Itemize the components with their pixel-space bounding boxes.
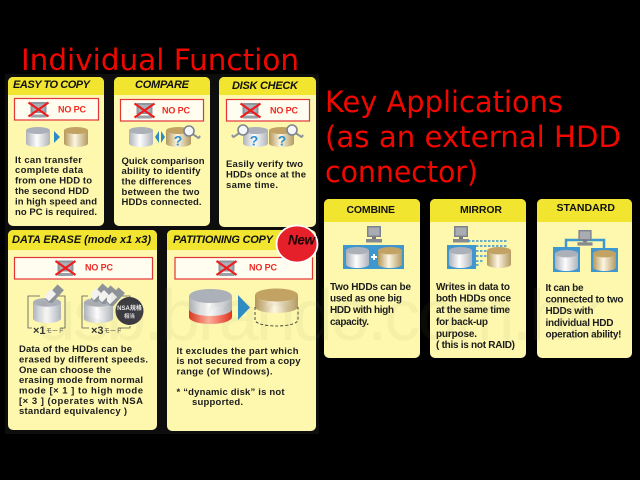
description: both HDDs once bbox=[436, 294, 511, 304]
panel: partitioning copy bbox=[167, 230, 316, 431]
heading: Key Applications: Key Applications bbox=[325, 85, 563, 119]
icon: check drives bbox=[232, 125, 304, 148]
description: HDD with high bbox=[330, 305, 394, 316]
icon: check drives: ? bbox=[278, 132, 286, 148]
panel: easy to copy bbox=[8, 77, 104, 226]
badge: New bbox=[276, 226, 318, 262]
heading: mirror: MIRROR bbox=[460, 204, 502, 216]
description: is not secured from a copy bbox=[176, 356, 301, 367]
icon: erase x1: モード bbox=[46, 328, 64, 335]
description: Easily verify two bbox=[226, 159, 303, 170]
no pc badge: NO PC bbox=[270, 106, 298, 116]
icon: mirrored drives bbox=[447, 226, 511, 269]
description bbox=[15, 155, 97, 218]
icon: NSA badge: 相当 bbox=[124, 312, 135, 320]
description: at the same time bbox=[436, 305, 510, 316]
icon: NSA badge bbox=[116, 297, 144, 325]
heading: data erase: DATA ERASE (mode x1 x3) bbox=[12, 234, 151, 246]
description: One can choose the bbox=[19, 365, 111, 376]
panel: data erase bbox=[8, 230, 157, 430]
description bbox=[226, 159, 306, 191]
description: connected to two bbox=[546, 294, 624, 306]
no pc badge bbox=[14, 258, 152, 279]
no pc badge: NO PC bbox=[162, 106, 190, 116]
description: Writes in data to bbox=[436, 282, 510, 293]
heading: combine: COMBINE bbox=[346, 204, 395, 216]
description: mode [× 1 ] to high mode bbox=[19, 386, 143, 396]
description: capacity. bbox=[330, 317, 369, 328]
arrow bbox=[238, 295, 250, 320]
icon: compare drives: ? bbox=[174, 132, 182, 148]
description: It can transfer bbox=[15, 155, 82, 166]
badge: New: New bbox=[288, 232, 316, 248]
description: for back-up bbox=[436, 317, 488, 328]
description: standard equivalency ) bbox=[19, 406, 127, 417]
heading: disk check: DISK CHECK bbox=[232, 80, 299, 92]
description: Two HDDs can be bbox=[330, 282, 411, 293]
description: the differences bbox=[122, 176, 192, 188]
description bbox=[176, 346, 301, 408]
description: purpose. bbox=[436, 329, 477, 340]
no pc badge: NO PC bbox=[85, 262, 114, 272]
no pc badge bbox=[14, 98, 98, 120]
description: HDDs connected. bbox=[122, 197, 202, 208]
icon: separate drives bbox=[553, 230, 618, 272]
icon: copy between drives bbox=[26, 127, 88, 147]
no pc badge bbox=[120, 100, 204, 121]
heading: Key Applications: connector) bbox=[325, 155, 478, 189]
icon: source drive with red partition bbox=[189, 289, 232, 324]
description: * “dynamic disk” is not bbox=[176, 387, 285, 398]
description: Quick comparison bbox=[122, 156, 205, 167]
no pc badge: NO PC bbox=[58, 104, 86, 114]
description: erasing mode from normal bbox=[19, 375, 143, 386]
no pc badge bbox=[175, 258, 312, 279]
watermark: usb.brando.com.hk bbox=[36, 276, 603, 356]
description: between the two bbox=[122, 187, 200, 198]
icon: erase x1 bbox=[28, 287, 65, 337]
title: Individual Function: Individual Function bbox=[21, 43, 299, 77]
panel: disk check bbox=[219, 77, 316, 227]
icon: combined drives bbox=[343, 226, 404, 269]
description: operation ability! bbox=[546, 330, 622, 340]
description: HDDs once at the bbox=[226, 170, 306, 180]
panel: combine bbox=[324, 199, 420, 358]
description: supported. bbox=[192, 397, 243, 408]
description bbox=[330, 282, 411, 328]
description: complete data bbox=[15, 165, 84, 176]
heading: Key Applications bbox=[325, 85, 621, 189]
description: It excludes the part which bbox=[176, 346, 299, 357]
description: from one HDD to bbox=[15, 176, 92, 186]
heading: Key Applications: (as an external HDD bbox=[325, 120, 621, 154]
icon: compare drives bbox=[129, 126, 200, 148]
panel: mirror bbox=[430, 199, 526, 358]
heading: compare: COMPARE bbox=[135, 79, 190, 91]
description: erased by different speeds. bbox=[19, 354, 148, 366]
description: range (of Windows). bbox=[176, 366, 272, 378]
icon: erase x3: モード bbox=[104, 328, 122, 335]
description: no PC is required. bbox=[15, 207, 97, 218]
description: used as one big bbox=[330, 294, 402, 304]
description: ability to identify bbox=[122, 166, 201, 177]
description: ( this is not RAID) bbox=[436, 340, 515, 351]
icon: target drive bbox=[255, 288, 298, 326]
description: It can be bbox=[546, 283, 584, 294]
description: in high speed and bbox=[15, 196, 97, 208]
description: individual HDD bbox=[546, 318, 614, 329]
description bbox=[546, 283, 624, 340]
description bbox=[122, 156, 205, 208]
description bbox=[436, 282, 515, 351]
no pc badge bbox=[226, 100, 310, 121]
description: the second HDD bbox=[15, 186, 89, 197]
icon: NSA badge: NSA規格 bbox=[117, 304, 142, 312]
heading: easy to copy: EASY TO COPY bbox=[13, 79, 92, 91]
panel: compare bbox=[114, 77, 210, 226]
description: Data of the HDDs can be bbox=[19, 344, 132, 355]
heading: partitioning copy: PATITIONING COPY bbox=[173, 234, 275, 246]
no pc badge: NO PC bbox=[249, 262, 278, 272]
description: [× 3 ] (operates with NSA bbox=[19, 396, 143, 407]
icon: erase x3: ×3 bbox=[91, 325, 104, 337]
description bbox=[19, 344, 148, 417]
description: same time. bbox=[226, 180, 278, 191]
description: HDDs with bbox=[546, 306, 594, 317]
icon: erase x3 bbox=[82, 286, 130, 337]
icon: check drives: ? bbox=[250, 132, 258, 148]
icon: erase x1: ×1 bbox=[33, 325, 46, 337]
panel: standard bbox=[537, 199, 632, 358]
heading: standard: STANDARD bbox=[556, 202, 615, 214]
